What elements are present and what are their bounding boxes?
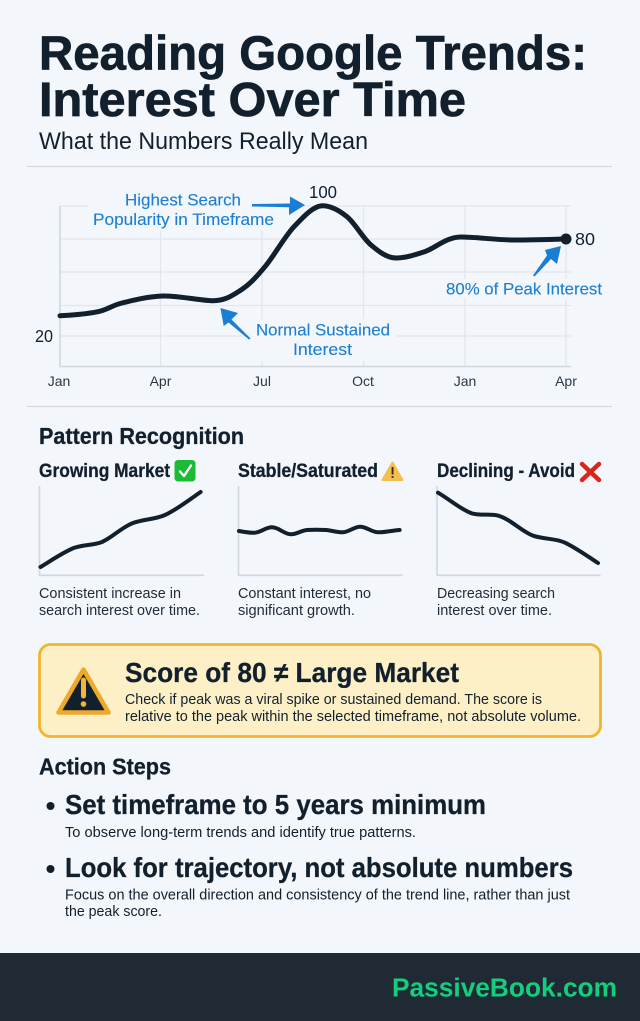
panel: stable saturated: [238, 460, 403, 619]
title: Reading Google Trends:: [39, 28, 587, 80]
step heading: Set timeframe to 5 years minimum: [65, 789, 486, 820]
x axis labels: Apr: [150, 373, 172, 389]
caption: declining avoid: [437, 586, 555, 619]
step description: the peak score.: [65, 904, 162, 920]
caption: growing market: Consistent increase in: [39, 586, 181, 602]
step heading: Look for trajectory, not absolute numbers: [65, 852, 573, 883]
panel: declining avoid: [437, 460, 600, 619]
annotation: normal sustained interest: Normal Sustained: [256, 320, 390, 340]
icon: red cross: [582, 464, 599, 480]
value label: 20: 20: [35, 326, 53, 346]
annotation: highest search popularity: Highest Search: [125, 190, 241, 210]
annotation: 80 percent of peak: 80% of Peak Interest: [446, 280, 602, 298]
caption: declining avoid: interest over time.: [437, 603, 552, 619]
callout: score warning: [40, 644, 600, 736]
mini chart: rising line: [40, 486, 204, 575]
x axis labels: Jul: [253, 373, 271, 389]
callout heading: Score of 80 ≠ Large Market: [125, 657, 459, 688]
annotation: normal sustained interest: Interest: [293, 340, 352, 359]
heading: pattern recognition: Pattern Recognition: [39, 423, 244, 449]
value label: 80: 80: [575, 229, 595, 249]
end point marker: [560, 234, 572, 244]
callout body: Check if peak was a viral spike or sustained demand. The score is: [125, 692, 542, 708]
annotation: normal sustained interest: [256, 320, 390, 359]
mini chart: falling line: [437, 486, 600, 575]
arrow: to sustained interest: [220, 308, 250, 340]
caption: stable saturated: [238, 586, 371, 619]
callout body: relative to the peak within the selected timeframe, not absolute volume.: [125, 709, 581, 725]
arrow: to peak: [252, 196, 305, 215]
heading: stable saturated: Stable/Saturated: [238, 460, 378, 482]
annotation: highest search popularity: Popularity in Timeframe: [93, 210, 274, 229]
x axis labels: Jan: [454, 373, 476, 389]
trend line: [60, 206, 565, 316]
mini chart: flat line: [238, 486, 403, 575]
caption: declining avoid: Decreasing search: [437, 586, 555, 602]
caption: stable saturated: significant growth.: [238, 603, 355, 619]
step description: To observe long-term trends and identify true patterns.: [65, 825, 416, 841]
heading: declining avoid: Declining - Avoid: [437, 460, 575, 482]
icon: warning triangle: [58, 670, 108, 712]
heading: growing market: Growing Market: [39, 460, 170, 482]
caption: growing market: [39, 586, 200, 619]
bullet: [46, 865, 54, 873]
icon: green check: [174, 460, 196, 482]
value label: 100: 100: [309, 182, 337, 202]
annotation: highest search popularity: [93, 190, 274, 229]
footer: [0, 953, 640, 1021]
x axis labels: Oct: [352, 373, 374, 389]
action step one: [46, 789, 486, 841]
caption: stable saturated: Constant interest, no: [238, 586, 371, 602]
title: Interest Over Time: [39, 74, 466, 127]
brand name: PassiveBook.com: [392, 974, 617, 1002]
step description: [65, 888, 570, 920]
x axis labels: [48, 373, 577, 389]
action step two: [46, 852, 573, 920]
x axis labels: Jan: [48, 373, 70, 389]
subtitle: What the Numbers Really Mean: [39, 128, 368, 155]
icon: warning: [382, 462, 402, 480]
title: [39, 28, 587, 127]
arrow: to end point: [533, 246, 561, 276]
step description: Focus on the overall direction and consistency of the trend line, rather than just: [65, 888, 570, 904]
callout body: [125, 692, 581, 725]
panel: growing market: [39, 460, 204, 619]
x axis labels: Apr: [555, 373, 577, 389]
heading: action steps: Action Steps: [39, 754, 171, 780]
bullet: [46, 802, 54, 810]
line chart: interest over time: [35, 182, 607, 389]
caption: growing market: search interest over time.: [39, 603, 200, 619]
